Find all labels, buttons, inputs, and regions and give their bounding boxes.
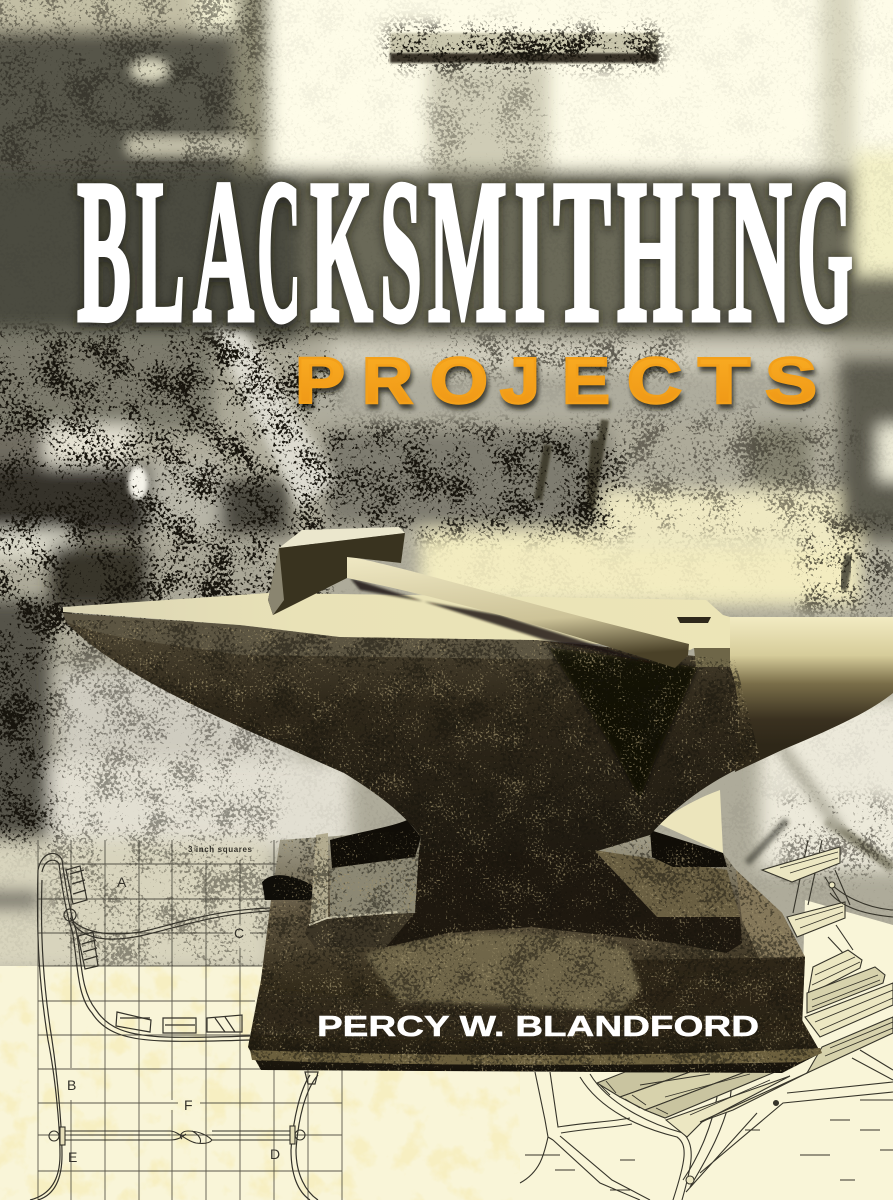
diagram letters	[67, 845, 280, 1165]
subtitle: T	[698, 344, 750, 417]
subtitle: E	[562, 344, 610, 417]
hammer top	[279, 527, 405, 548]
horn	[730, 617, 893, 772]
title: I	[514, 138, 546, 365]
subtitle: J	[500, 344, 540, 417]
twisted stay	[49, 1126, 305, 1145]
title: S	[380, 138, 422, 365]
handle shadow	[350, 578, 660, 665]
title: M	[428, 138, 507, 365]
title: H	[617, 138, 683, 365]
subtitle: C	[627, 344, 682, 417]
subtitle shadow: J	[502, 349, 542, 422]
diagram letters: B	[67, 1077, 76, 1093]
title shadow: M	[428, 140, 507, 367]
title: A	[193, 138, 254, 365]
subtitle shadow: R	[364, 349, 415, 422]
diagram letters: F	[184, 1097, 193, 1113]
subtitle: O	[430, 344, 488, 417]
title shadow: A	[193, 140, 254, 367]
cream lower paper at right	[520, 900, 893, 1200]
title shadow: H	[617, 140, 683, 367]
hollows under the waist	[330, 820, 421, 868]
top face	[63, 593, 730, 650]
subtitle shadow: O	[432, 349, 490, 422]
title shadow: L	[136, 140, 185, 367]
subtitle shadow: T	[700, 349, 752, 422]
title: N	[728, 138, 792, 365]
rust streaks	[538, 420, 605, 510]
diagram letters: D	[270, 1146, 280, 1162]
hammer	[268, 527, 689, 668]
subtitle shadow: S	[767, 349, 819, 422]
title shadow: T	[553, 140, 611, 367]
diagram letters: C	[234, 925, 244, 941]
right foot top	[594, 850, 740, 917]
anvil	[60, 527, 893, 1080]
speckled surface	[66, 620, 820, 1073]
author: PERCY W. BLANDFORD	[317, 1011, 759, 1043]
diagram letters: A	[117, 874, 127, 890]
title: B	[77, 138, 131, 365]
cast iron ends	[520, 1072, 650, 1200]
heel edge block	[694, 648, 730, 667]
hammer face	[268, 533, 405, 615]
title shadow: C	[257, 140, 301, 367]
subtitle: S	[765, 344, 817, 417]
dark beam	[390, 52, 658, 63]
seat slats	[597, 1072, 690, 1097]
smudge lines at right	[747, 820, 787, 863]
plan grid	[38, 840, 342, 1200]
wooden block	[248, 830, 822, 1073]
subtitle: R	[362, 344, 413, 417]
title: T	[553, 138, 611, 365]
subtitle shadow: C	[629, 349, 684, 422]
diagram letters: E	[68, 1149, 77, 1165]
title shadow: S	[380, 140, 422, 367]
title: I	[690, 138, 722, 365]
subtitle: P	[295, 344, 345, 417]
hammer handle	[347, 556, 689, 668]
title: C	[257, 138, 301, 365]
subtitle shadow: P	[297, 349, 347, 422]
title shadow: I	[514, 140, 546, 367]
diagram letters: 3 inch squares	[188, 845, 253, 854]
title shadow: B	[77, 140, 131, 367]
title: L	[136, 138, 185, 365]
title shadow: I	[690, 140, 722, 367]
left foot top	[330, 848, 471, 917]
bench perspective drawing	[520, 840, 893, 1200]
bench plan diagram	[30, 840, 342, 1200]
body upper strip	[63, 613, 600, 660]
title: K	[310, 138, 373, 365]
anvil body	[63, 613, 782, 852]
diagonal lights	[212, 330, 335, 510]
bench end profile	[30, 853, 318, 1200]
foot body	[305, 848, 742, 953]
title shadow: K	[310, 140, 373, 367]
subtitle shadow: E	[564, 349, 612, 422]
ground hatching	[525, 1100, 893, 1190]
title shadow: N	[728, 140, 792, 367]
hammer cast shadow	[548, 647, 698, 800]
back slats	[793, 840, 853, 953]
